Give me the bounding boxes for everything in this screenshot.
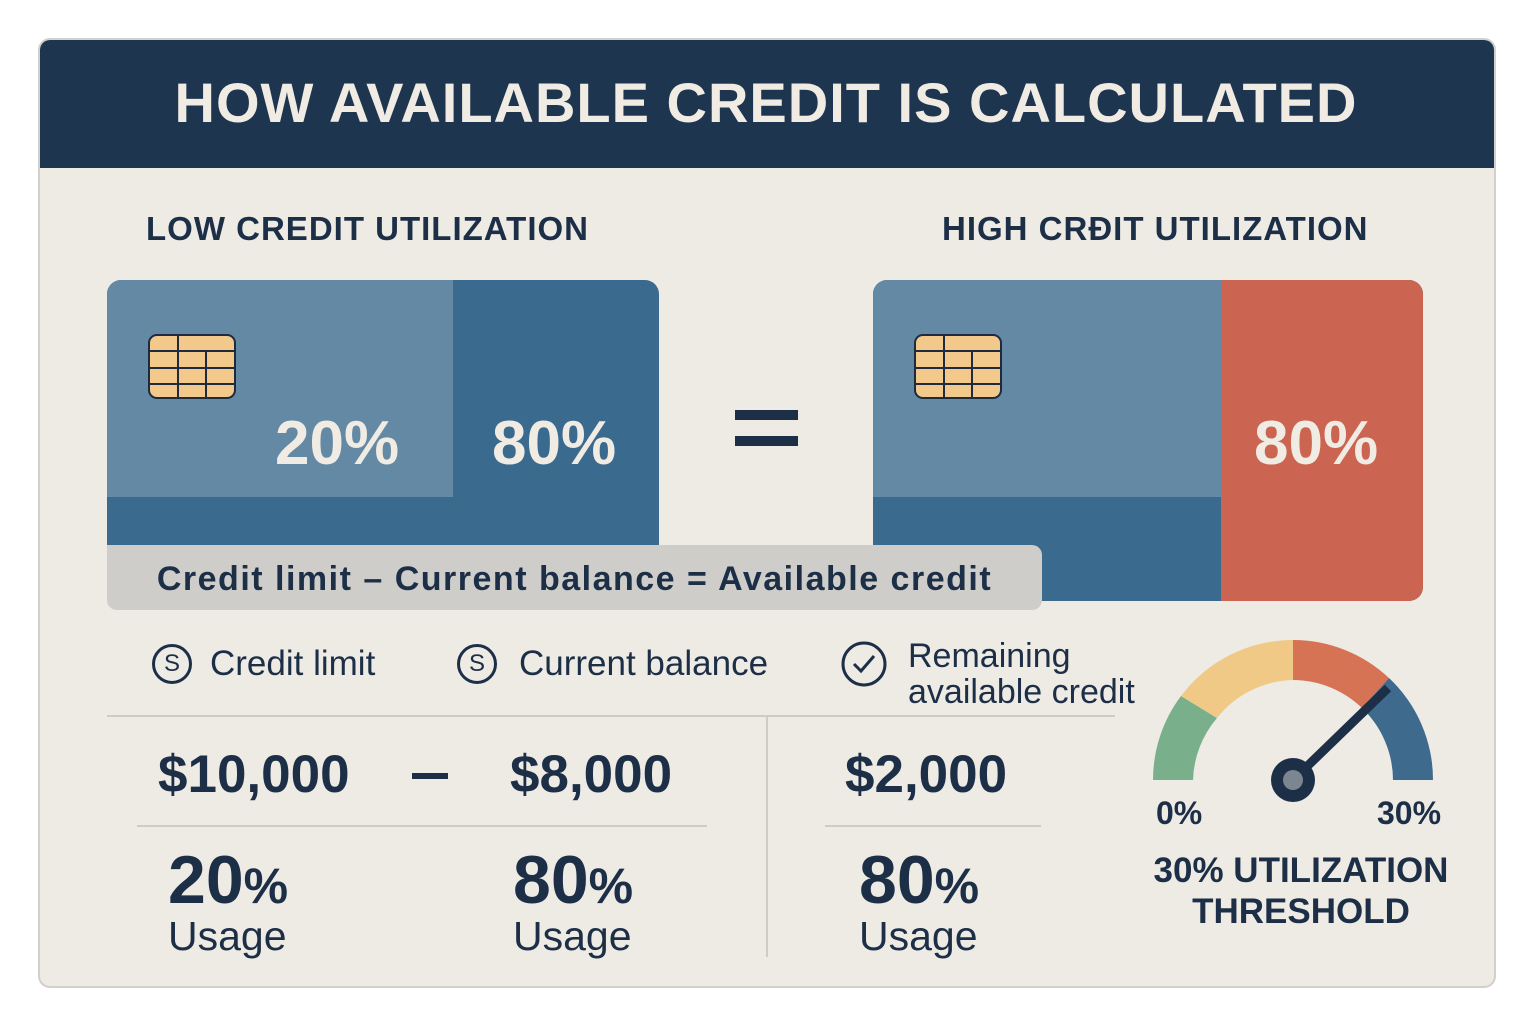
value: $2,000: $2,000: [845, 745, 1007, 804]
usage: 20%: Usage: [168, 913, 287, 959]
icon: chip: [148, 334, 236, 399]
usage: 20%: 20%: [168, 842, 288, 918]
card: low utilization: [107, 280, 659, 560]
legend: remaining: [842, 637, 1135, 711]
usage: 80%: Usage: [513, 913, 632, 959]
usage: 20%: [168, 842, 288, 959]
icon: chip: [914, 334, 1002, 399]
legend: credit limit: Credit limit: [210, 644, 375, 683]
gauge label 0%: 0%: [1156, 795, 1202, 831]
legend: current balance: S: [469, 650, 485, 677]
value: $10,000: $10,000: [158, 745, 350, 804]
gauge label 30%: 30%: [1377, 795, 1441, 831]
legend: remaining: available credit: [908, 673, 1135, 711]
gauge caption: 30% UTILIZATION: [1154, 851, 1448, 890]
heading: high utilization: HIGH CRĐIT UTILIZATION: [942, 210, 1369, 247]
gauge caption: THRESHOLD: [1192, 892, 1410, 931]
title: HOW AVAILABLE CREDIT IS CALCULATED: [175, 71, 1357, 134]
gauge caption: [1154, 851, 1448, 931]
usage: 80%: 80%: [513, 842, 633, 918]
heading: low utilization: LOW CREDIT UTILIZATION: [146, 210, 589, 247]
20% label: 20%: [275, 409, 399, 478]
minus sign: [412, 773, 448, 779]
usage: 80% right: [859, 842, 979, 959]
80% label: 80%: [492, 409, 616, 478]
80% label: 80%: [1254, 409, 1378, 478]
card: high utilization: [873, 280, 1423, 601]
formula bar: [107, 545, 1042, 610]
usage: 80%: [513, 842, 633, 959]
legend: remaining: Remaining: [908, 637, 1071, 675]
legend: current balance: Current balance: [519, 644, 768, 683]
divider lines: [107, 715, 1115, 717]
usage: 80% right: 80%: [859, 842, 979, 918]
formula bar: Credit limit – Current balance = Available credit: [157, 560, 992, 598]
equals sign: [735, 410, 798, 446]
legend: credit limit: S: [164, 650, 180, 677]
usage: 80% right: Usage: [859, 913, 978, 959]
gauge: [1153, 640, 1433, 802]
header bar: [40, 40, 1494, 168]
value: $8,000: $8,000: [510, 745, 672, 804]
